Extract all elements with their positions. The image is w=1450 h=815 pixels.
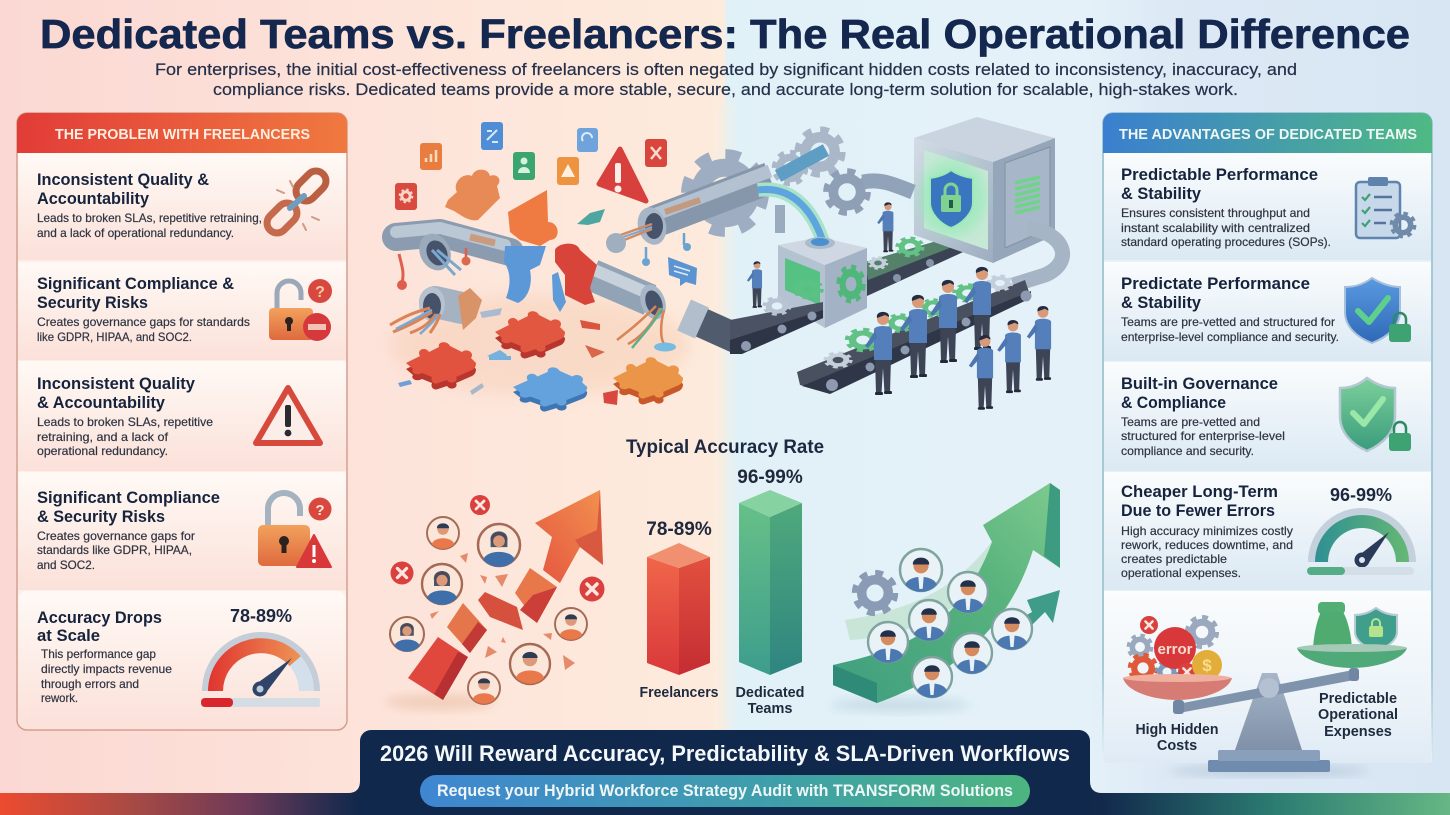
row: predictable performance: Predictable Performance xyxy=(1121,166,1318,184)
team avatars xyxy=(868,549,1032,698)
row: accuracy drops: This performance gap xyxy=(41,647,156,661)
icon: open padlock xyxy=(269,279,332,341)
label: high hidden costs xyxy=(1136,722,1218,754)
row: accuracy drops: rework. xyxy=(41,691,78,705)
panel: the advantages of dedicated teams xyxy=(1103,113,1432,776)
panel: the problem with freelancers xyxy=(17,113,347,730)
row: built-in governance: structured for enterprise-level xyxy=(1121,429,1285,443)
call to action banner xyxy=(348,730,1102,815)
label: predictable operational expenses: Operational xyxy=(1318,707,1398,723)
workers xyxy=(747,202,1051,410)
label: predictable operational expenses: Expenses xyxy=(1324,724,1392,740)
row: accuracy drops xyxy=(18,591,346,729)
row: cheaper long-term: High accuracy minimizes costly xyxy=(1121,524,1293,538)
row: balance scale xyxy=(1104,591,1431,776)
row: inconsistent quality: Leads to broken SLAs, repetitive retraining, xyxy=(37,211,262,225)
gauge: 78-89%: 78-89% xyxy=(230,606,292,626)
left pan with errors: error xyxy=(1157,641,1193,658)
row: built-in governance: Built-in Governance xyxy=(1121,375,1278,393)
row: inconsistent quality xyxy=(18,153,346,260)
panel header: THE PROBLEM WITH FREELANCERS xyxy=(55,127,310,143)
bar: freelancers: Freelancers xyxy=(640,685,718,701)
row: predictable performance: instant scalability with centralized xyxy=(1121,221,1310,235)
row: cheaper long-term xyxy=(1104,472,1431,590)
bar: freelancers xyxy=(640,519,718,701)
left conveyor xyxy=(730,280,823,354)
small green arrow xyxy=(1000,590,1060,645)
shattered arrow xyxy=(408,490,603,700)
row: inconsistent quality 2: & Accountability xyxy=(37,394,166,412)
icon: warning triangle xyxy=(256,388,320,443)
upper conveyor xyxy=(865,232,972,296)
label: high hidden costs: High Hidden xyxy=(1136,722,1218,738)
row: predictable performance xyxy=(1104,153,1431,260)
illustration: rising arrow with dedicated team xyxy=(830,483,1060,712)
water stream xyxy=(758,189,824,245)
bar: dedicated teams xyxy=(736,467,804,717)
button: Request your Hybrid Workforce Strategy Audit with TRANSFORM Solutions xyxy=(437,782,1013,800)
row: compliance risks xyxy=(18,262,346,360)
row: predictate performance: & Stability xyxy=(1121,294,1202,312)
row: built-in governance: & Compliance xyxy=(1121,394,1226,412)
label: predictable operational expenses xyxy=(1318,691,1398,740)
row: accuracy drops: Accuracy Drops xyxy=(37,609,162,627)
icon: padlock with warning xyxy=(258,493,332,567)
row: inconsistent quality 2: Leads to broken SLAs, repetitive xyxy=(37,415,213,429)
label: predictable operational expenses: Predictable xyxy=(1319,691,1397,707)
icon: green shield with lock xyxy=(1340,378,1411,451)
warning triangle xyxy=(599,149,646,201)
bar: dedicated teams: Teams xyxy=(748,701,792,717)
big green arrow xyxy=(833,483,1060,703)
pipe center right xyxy=(592,269,740,352)
row: accuracy drops: directly impacts revenue xyxy=(41,662,172,676)
row: compliance risks: Creates governance gaps for standards xyxy=(37,315,250,329)
gauge: 78-89% xyxy=(201,606,320,707)
gauge: 96-99%: 96-99% xyxy=(1330,485,1392,505)
row: built-in governance xyxy=(1104,362,1431,471)
row: predictable performance: Ensures consistent throughput and xyxy=(1121,206,1310,220)
row: built-in governance: Teams are pre-vetted and xyxy=(1121,415,1260,429)
subtitle: compliance risks. Dedicated teams provide a more stable, secure, and accurate long-term solution for scalable, high-stakes work. xyxy=(213,80,1238,99)
row: predictate performance: Predictate Performance xyxy=(1121,275,1310,293)
left pan with errors: $ xyxy=(1202,656,1212,675)
floating puzzle pieces xyxy=(445,170,597,312)
panel header: THE ADVANTAGES OF DEDICATED TEAMS xyxy=(1119,127,1417,143)
soft arrow tail xyxy=(845,530,1012,640)
row: accuracy drops: at Scale xyxy=(37,627,100,645)
illustration: broken freelancer pipeline xyxy=(390,122,770,412)
scattered freelancer avatars xyxy=(390,495,604,704)
illustration: broken arrow and scattered freelancers xyxy=(385,490,604,710)
row: compliance risks 2: and SOC2. xyxy=(37,558,95,572)
pipe upper right with leaks xyxy=(577,171,770,286)
gear icon xyxy=(855,573,895,613)
row: inconsistent quality 2: Inconsistent Quality xyxy=(37,375,196,393)
vault xyxy=(914,117,1055,263)
row: inconsistent quality 2 xyxy=(18,361,346,471)
row: predictate performance xyxy=(1104,262,1431,361)
bottom colour strip xyxy=(0,793,1450,815)
row: inconsistent quality: and a lack of operational redundancy. xyxy=(37,226,234,240)
broken pipe lower left xyxy=(390,287,482,334)
title: Dedicated Teams vs. Freelancers: The Real Operational Difference xyxy=(40,11,1410,57)
left pan with errors xyxy=(1123,616,1232,700)
row: compliance risks 2: & Security Risks xyxy=(37,508,165,526)
row: built-in governance: compliance and security. xyxy=(1121,444,1254,458)
row: cheaper long-term: Due to Fewer Errors xyxy=(1121,502,1275,520)
chart title: Typical Accuracy Rate xyxy=(626,436,824,458)
subtitle: For enterprises, the initial cost-effectiveness of freelancers is often negated by significant hidden costs related to inconsistency, inaccuracy, and xyxy=(155,60,1297,79)
connector pipes xyxy=(863,181,1063,285)
row: compliance risks 2: Significant Compliance xyxy=(37,489,220,507)
row: compliance risks: like GDPR, HIPAA, and SOC2. xyxy=(37,330,192,344)
row: inconsistent quality: Inconsistent Quality & xyxy=(37,171,209,189)
bar: dedicated teams: 96-99% xyxy=(737,467,803,488)
small intake box xyxy=(778,237,867,328)
panel header xyxy=(1103,113,1432,153)
row: cheaper long-term: Cheaper Long-Term xyxy=(1121,483,1278,501)
icon: blue shield with lock xyxy=(1345,278,1411,343)
bar: dedicated teams: Dedicated xyxy=(736,685,804,701)
fallen puzzle pieces xyxy=(398,308,683,412)
row: compliance risks 2 xyxy=(18,472,346,590)
icon: open padlock: ? xyxy=(315,284,325,301)
icon: clipboard and gear xyxy=(1356,177,1415,238)
banner headline: 2026 Will Reward Accuracy, Predictability & SLA-Driven Workflows xyxy=(380,741,1070,766)
row: compliance risks 2: standards like GDPR, HIPAA, xyxy=(37,543,192,557)
row: predictable performance: & Stability xyxy=(1121,185,1202,203)
row: predictate performance: Teams are pre-vetted and structured for xyxy=(1121,315,1335,329)
right pan with weight and shield xyxy=(1297,602,1407,668)
panel header xyxy=(17,113,347,153)
floating app icons xyxy=(395,122,667,210)
icon: broken chain xyxy=(263,167,330,237)
row: predictate performance: enterprise-level compliance and security. xyxy=(1121,330,1339,344)
bar: freelancers: 78-89% xyxy=(646,519,712,540)
row: cheaper long-term: operational expenses. xyxy=(1121,566,1241,580)
illustration: balance scale xyxy=(1123,602,1407,776)
row: predictable performance: standard operating procedures (SOPs). xyxy=(1121,235,1331,249)
label: high hidden costs: Costs xyxy=(1157,738,1197,754)
row: compliance risks 2: Creates governance gaps for xyxy=(37,529,195,543)
subtitle xyxy=(155,60,1297,99)
row: inconsistent quality: Accountability xyxy=(37,190,150,208)
gauge: 96-99% xyxy=(1307,485,1416,575)
row: cheaper long-term: creates predictable xyxy=(1121,552,1227,566)
row: inconsistent quality 2: retraining, and a lack of xyxy=(37,430,169,444)
row: compliance risks: Security Risks xyxy=(37,294,148,312)
row: cheaper long-term: rework, reduces downtime, and xyxy=(1121,538,1293,552)
row: accuracy drops: through errors and xyxy=(41,677,139,691)
illustration: dedicated team pipeline xyxy=(730,117,1063,410)
broken pipe upper left xyxy=(396,228,510,290)
icon: large gear behind the pipe xyxy=(687,155,763,231)
row: compliance risks: Significant Compliance & xyxy=(37,275,234,293)
button xyxy=(420,775,1030,807)
chart: typical accuracy rate xyxy=(626,436,824,717)
icon: padlock with warning: ? xyxy=(315,502,325,519)
main conveyor xyxy=(797,276,1032,394)
gears xyxy=(774,130,867,233)
row: inconsistent quality 2: operational redundancy. xyxy=(37,444,168,458)
